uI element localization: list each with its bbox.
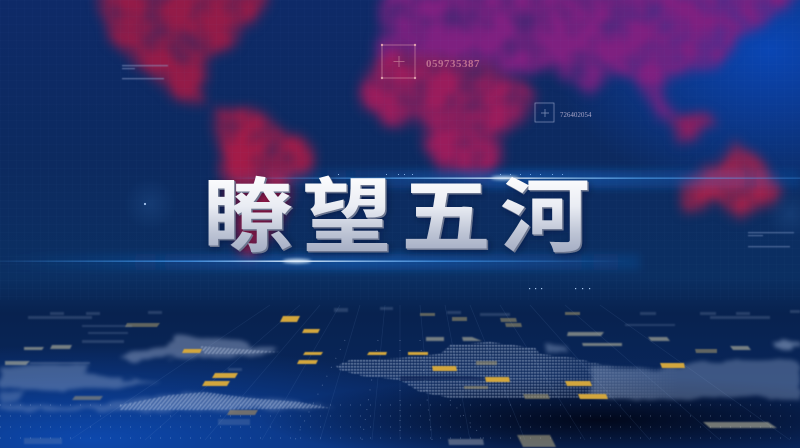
crosshair marker: 726402054: 726402054 [560,112,592,119]
bottom map: upper-left landmass [118,335,280,361]
crosshair marker: 059735387 [381,44,480,79]
bottom map: central dotted landmass [336,342,680,399]
bottom map: lower-left landmass [0,392,335,411]
bottom map: right cloudy landmass [545,341,800,400]
lower light beam [0,254,640,270]
title: 瞭望五河 [203,172,599,263]
upper light beam [200,170,800,188]
perspective grid floor [70,305,790,440]
world map: red continents [86,0,800,258]
crosshair marker: 059735387: 059735387 [426,58,480,70]
crosshair marker: 726402054 [535,103,592,122]
africa [360,52,534,176]
dots near title and below [338,174,590,289]
bottom map: left landmass [0,362,160,402]
eurasia [376,0,800,124]
north america [86,0,272,106]
fine grid overlay [0,0,800,300]
yellow data bars [182,316,685,399]
pale data bars [5,332,777,447]
dim data bars [125,312,717,415]
south america [212,106,318,258]
small data text: upper left [122,65,168,79]
small data text: right side [748,232,794,247]
australia [682,140,782,216]
faint data blocks [24,307,800,444]
lens circles [124,178,800,238]
indonesia [660,110,712,140]
